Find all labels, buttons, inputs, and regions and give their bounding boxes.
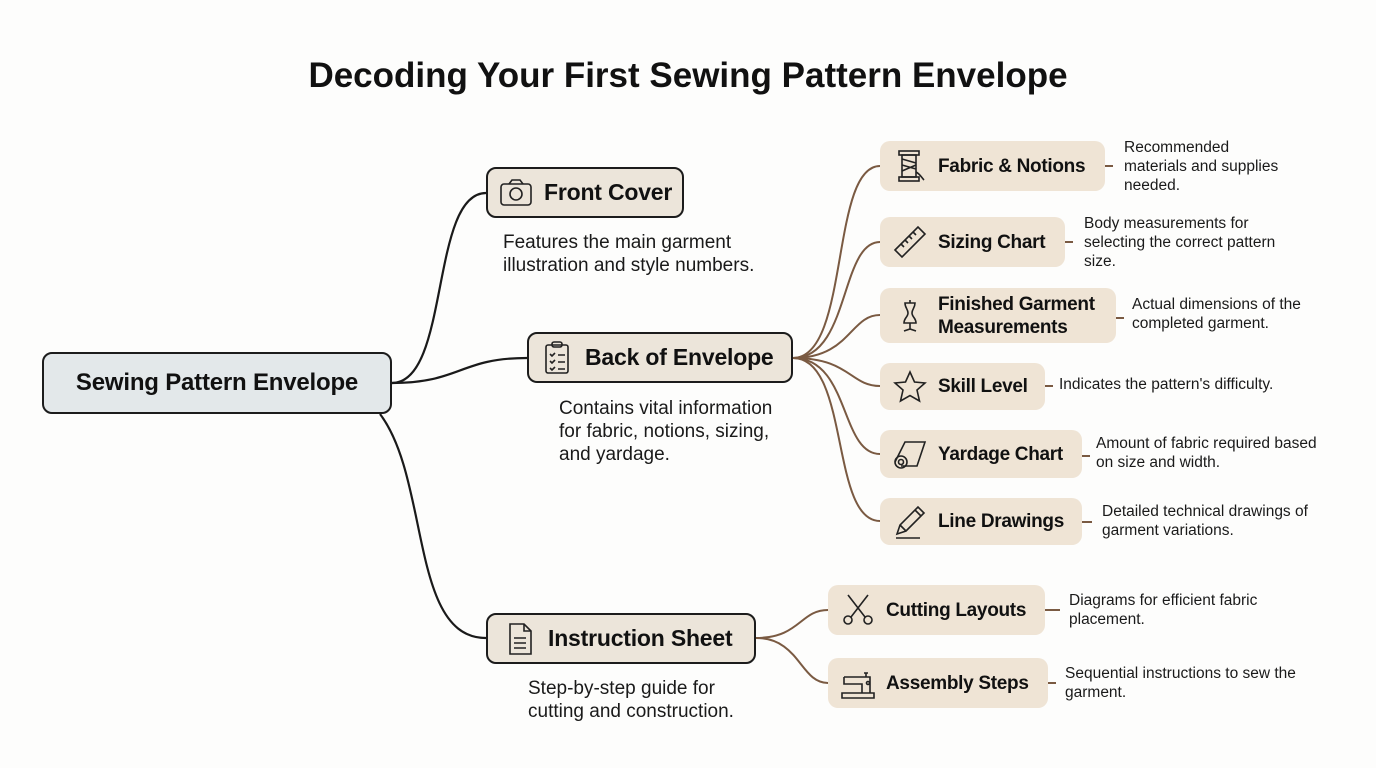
desc: line — [1102, 503, 1308, 539]
icon: star — [893, 370, 927, 403]
icon: document — [509, 623, 532, 655]
text: back: Contains vital information — [559, 398, 772, 419]
root node: Sewing Pattern Envelope — [76, 369, 358, 396]
node: back of envelope — [527, 332, 793, 383]
icon: sewing machine — [841, 672, 875, 699]
desc: sizing: selecting the correct pattern — [1084, 234, 1275, 251]
icon: ruler — [894, 226, 926, 258]
desc: sizing: size. — [1084, 253, 1116, 270]
desc: cutting: Diagrams for efficient fabric — [1069, 592, 1257, 609]
sub: line drawings — [880, 498, 1082, 545]
node: instruction sheet: Instruction Sheet — [548, 625, 732, 651]
icon: camera — [500, 179, 532, 206]
sub: line drawings: Line Drawings — [938, 511, 1064, 532]
sub: yardage: Yardage Chart — [938, 444, 1063, 464]
desc: skill: Indicates the pattern's difficulty. — [1059, 376, 1273, 393]
node: front cover: Front Cover — [544, 179, 672, 205]
desc: fabric — [1124, 139, 1278, 194]
sub: fabric: Fabric & Notions — [938, 156, 1085, 176]
text: instruction — [528, 678, 734, 722]
icon: clipboard — [545, 341, 569, 374]
desc: cutting: placement. — [1069, 611, 1145, 628]
desc: finished: Actual dimensions of the — [1132, 296, 1301, 313]
desc: assembly: Sequential instructions to sew the — [1065, 665, 1296, 682]
desc: line: garment variations. — [1102, 522, 1234, 539]
icon: pencil — [896, 506, 925, 539]
sub: finished — [880, 288, 1116, 343]
desc: sizing — [1084, 215, 1275, 270]
sub: sizing: Sizing Chart — [938, 232, 1045, 252]
text: front cover: illustration and style numbers. — [503, 255, 754, 276]
desc: line: Detailed technical drawings of — [1102, 503, 1308, 520]
text: front cover — [503, 232, 754, 276]
sub: cutting: Cutting Layouts — [886, 600, 1026, 620]
node: front cover — [486, 167, 684, 218]
desc: sizing: Body measurements for — [1084, 215, 1249, 232]
icon: spool — [898, 150, 924, 182]
desc: assembly: garment. — [1065, 684, 1126, 701]
text: instruction: Step-by-step guide for — [528, 678, 715, 699]
desc: assembly — [1065, 665, 1296, 701]
desc: finished — [1132, 296, 1301, 332]
desc: finished: completed garment. — [1132, 315, 1269, 332]
sub: yardage — [880, 430, 1082, 478]
text: back: for fabric, notions, sizing, — [559, 421, 769, 442]
desc: yardage: on size and width. — [1096, 454, 1220, 471]
text: instruction: cutting and construction. — [528, 701, 734, 722]
desc: cutting — [1069, 592, 1257, 628]
desc: fabric: needed. — [1124, 177, 1180, 194]
sub: fabric — [880, 141, 1105, 191]
icon: scissors — [843, 594, 873, 625]
title: Decoding Your First Sewing Pattern Envelope — [308, 56, 1068, 95]
sub: sizing — [880, 217, 1065, 267]
desc: yardage: Amount of fabric required based — [1096, 435, 1317, 452]
desc: yardage — [1096, 435, 1317, 471]
desc: fabric: materials and supplies — [1124, 158, 1278, 175]
sub: skill: Skill Level — [938, 376, 1028, 397]
sub: assembly: Assembly Steps — [886, 672, 1029, 694]
sub: cutting — [828, 585, 1045, 635]
sub: skill — [880, 363, 1045, 410]
text: front cover: Features the main garment — [503, 232, 731, 253]
sub: finished: Measurements — [938, 316, 1067, 338]
desc: fabric: Recommended — [1124, 139, 1229, 156]
node: instruction sheet — [486, 613, 756, 664]
icon: fabric roll — [894, 441, 926, 469]
icon: dress form — [903, 300, 917, 332]
text: back: and yardage. — [559, 444, 670, 465]
node: back of envelope: Back of Envelope — [585, 344, 774, 370]
text: back — [559, 398, 772, 465]
sub: finished: Finished Garment — [938, 294, 1095, 314]
root node — [42, 352, 392, 414]
sub: assembly — [828, 658, 1048, 708]
